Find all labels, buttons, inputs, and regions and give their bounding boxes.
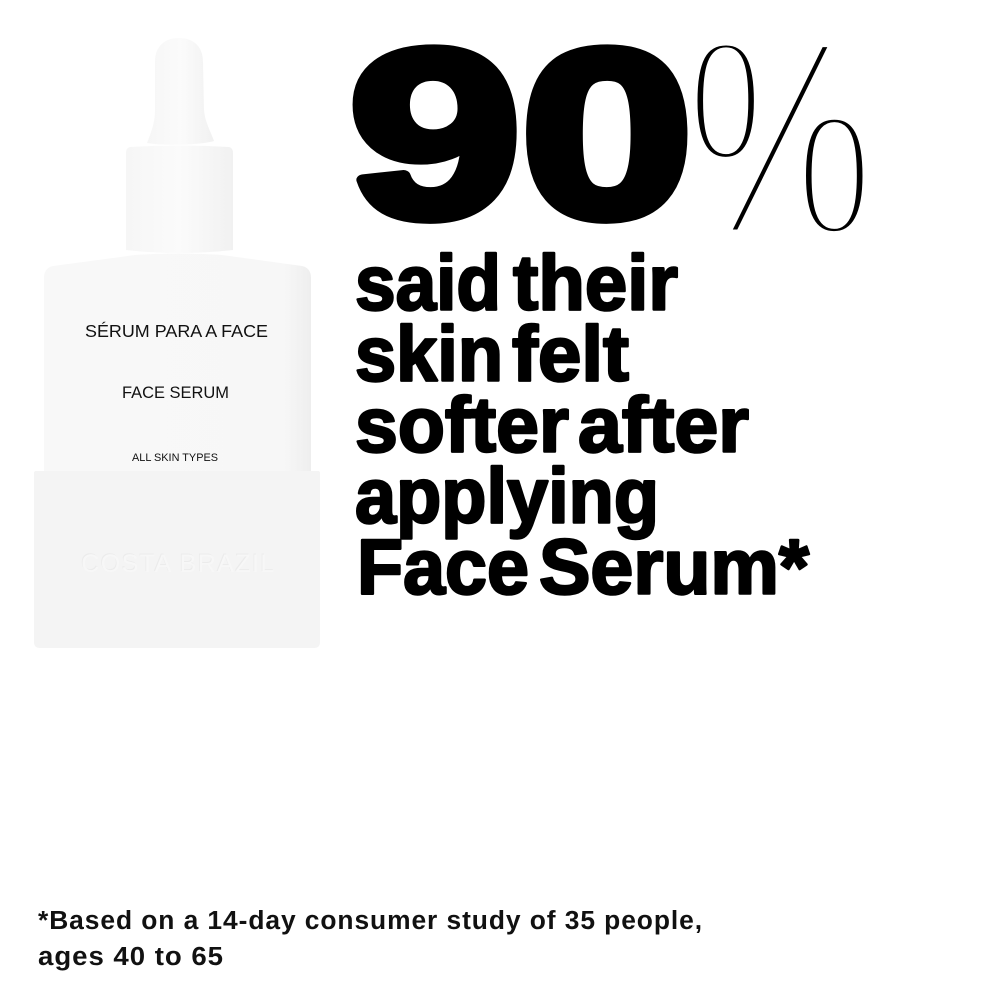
footnote line 1: *Based on a 14-day consumer study of 35 people, [38,907,703,935]
headline line 1 [355,238,678,326]
embossed brand: costa brazil: COSTA BRAZIL [81,550,274,578]
headline line 5: Serum* [539,522,810,610]
headline line 3: softer [355,380,569,468]
headline line 3 [355,380,749,468]
headline line 3: after [578,380,749,468]
headline line 2 [355,310,629,398]
footnote [38,907,703,971]
bottle dropper bulb [147,38,214,145]
bottle body [44,254,311,472]
label: all skin types: ALL SKIN TYPES [132,452,218,464]
statistic: 90 percent [349,0,875,297]
product: serum bottle [34,38,320,648]
headline line 1: their [513,238,678,326]
headline line 5: Face [357,522,529,610]
bottle base [34,471,320,648]
headline line 2: felt [512,310,629,398]
big number 90: 90 [349,2,693,267]
bottle collar [126,146,233,253]
label: face serum: FACE SERUM [122,383,229,402]
label: serum para a face: SÉRUM PARA A FACE [85,321,268,341]
headline line 1: said [355,238,501,326]
headline line 2: skin [355,310,503,398]
headline line 5 [357,522,810,610]
footnote line 2: ages 40 to 65 [38,943,224,971]
headline [355,238,810,610]
embossed brand: costa brazil: COSTA BRAZIL [80,549,274,577]
headline line 4: applying [355,452,659,540]
